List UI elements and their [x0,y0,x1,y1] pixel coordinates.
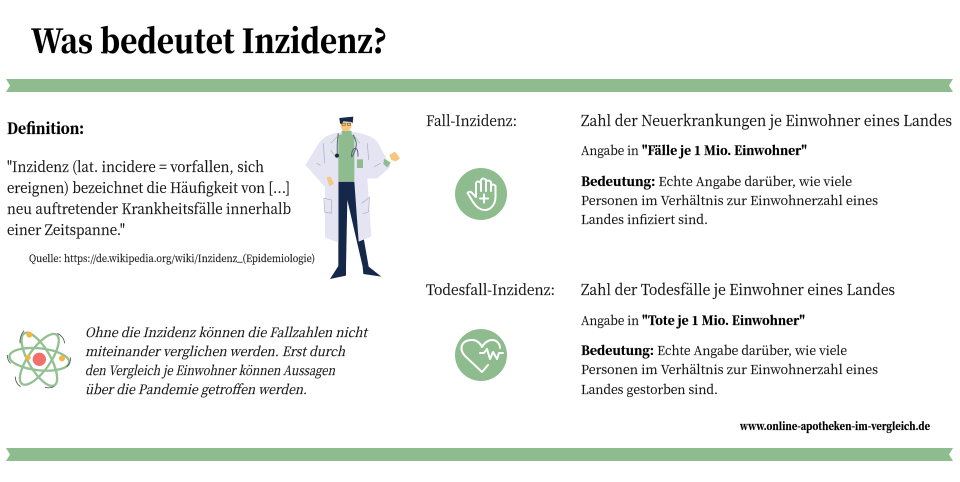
definition quote: einer Zeitspanne." [7,219,125,240]
definition quote: neu auftretender Krankheitsfälle innerhalb [7,198,291,219]
meaning text: Landes infiziert sind. [581,210,708,228]
panel: Fall-Inzidenz [426,110,952,228]
atom note text: den Vergleich je Einwohner können Aussagen [85,360,335,379]
definition quote: "Inzidenz (lat. incidere = vorfallen, sich [7,156,264,177]
bottom ribbon [6,448,953,461]
unit line: Angabe in "Tote je 1 Mio. Einwohner" [581,311,805,329]
meaning text: Landes gestorben sind. [581,380,718,398]
top ribbon [6,79,953,92]
definition quote [7,156,291,240]
atom note text: miteinander verglichen werden. Erst durch [85,341,345,360]
meaning text [581,172,878,228]
icon: hand with plus [455,168,507,220]
panel: definition [7,117,315,265]
unit line: Angabe in "Fälle je 1 Mio. Einwohner" [581,141,807,159]
icon: doctor [305,117,400,279]
website url: www.online-apotheken-im-vergleich.de [739,419,930,434]
label: Fall-Inzidenz: [426,110,517,131]
meaning text: Personen im Verhältnis zur Einwohnerzahl eines [581,360,878,378]
icon: heart with pulse [455,329,507,381]
panel: atom note [7,322,369,398]
meaning text: Bedeutung: Echte Angabe darüber, wie viele [581,341,847,359]
icon: atom [7,328,71,391]
meaning text: Bedeutung: Echte Angabe darüber, wie viele [581,172,852,190]
heading: Zahl der Todesfälle je Einwohner eines Landes [581,279,895,300]
panel: Todesfall-Inzidenz [426,279,895,398]
atom note text: Ohne die Inzidenz können die Fallzahlen nicht [85,322,369,341]
definition quote: ereignen) bezeichnet die Häufigkeit von [...] [7,177,290,198]
meaning text: Personen im Verhältnis zur Einwohnerzahl eines [581,191,878,209]
source line: Quelle: https://de.wikipedia.org/wiki/Inzidenz_(Epidemiologie) [29,250,315,265]
meaning text [581,341,878,398]
title: Was bedeutet Inzidenz? [31,16,387,63]
definition heading: Definition: [7,117,84,139]
label: Todesfall-Inzidenz: [426,279,555,300]
atom note text: über die Pandemie getroffen werden. [85,379,307,398]
atom note text [85,322,369,398]
